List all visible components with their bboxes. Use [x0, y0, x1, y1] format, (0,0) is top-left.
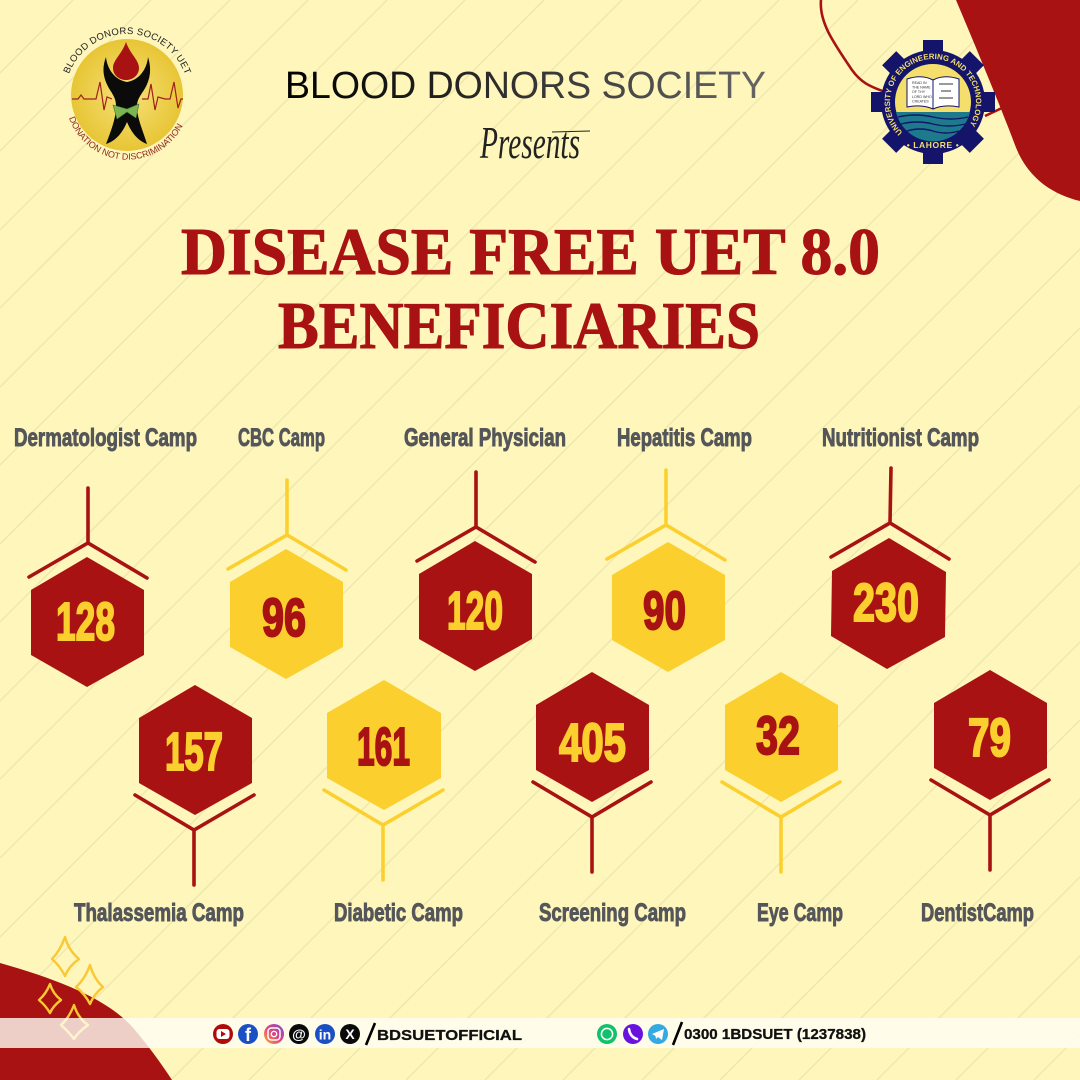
title: [181, 215, 880, 363]
logo text top: BLOOD DONORS SOCIETY UET: [63, 27, 192, 74]
icon: whatsapp: [597, 1024, 617, 1044]
icon: linkedin: in: [319, 1026, 331, 1042]
logo: Blood Donors Society: [63, 27, 192, 160]
title: DISEASE FREE UET 8.0: [181, 215, 880, 289]
camp: Diabetic 161: Diabetic Camp: [334, 899, 463, 927]
icon: facebook: f: [245, 1025, 252, 1045]
camp: General Physician 120: [404, 424, 566, 671]
camp: Hepatitis 90: 90: [643, 581, 686, 641]
icon: linkedin: [315, 1024, 335, 1044]
ring text bottom: • LAHORE •: [907, 140, 959, 150]
title: BENEFICIARIES: [278, 289, 760, 363]
icon: facebook: [238, 1024, 258, 1045]
icon: figure: [103, 57, 150, 144]
decorative red corner top right: [956, 0, 1080, 201]
camp: Nutritionist 230: [822, 424, 979, 669]
camp: CBC 96: [228, 424, 346, 679]
contact band: [0, 1018, 1080, 1048]
icon: gear: [871, 40, 995, 164]
camp: Thalassemia 157: 157: [165, 722, 223, 782]
icon: instagram: [264, 1024, 284, 1044]
script: Presents: [479, 117, 590, 168]
camp: Dentist 79: DentistCamp: [921, 899, 1034, 927]
icon: x: [340, 1024, 360, 1044]
phone number: 0300 1BDSUET (1237838): [684, 1027, 866, 1043]
camp: Dermatologist 128: 128: [56, 592, 115, 652]
camp: General Physician 120: General Physician: [404, 424, 566, 452]
slash divider left: [366, 1023, 375, 1045]
logo: University of Engineering and Technology: [871, 40, 995, 164]
icon: sparkle stars: [39, 937, 103, 1039]
camp: Eye 32: 32: [756, 706, 800, 766]
camp: Dentist 79: 79: [968, 708, 1011, 768]
logo: University of Engineering and Technology: READ IN: [912, 81, 927, 85]
logo: University of Engineering and Technology: CREATES: [912, 99, 929, 103]
camp: Thalassemia 157: Thalassemia Camp: [74, 899, 244, 927]
icon: youtube: [213, 1024, 233, 1044]
icon: water waves: [896, 112, 970, 141]
camp: Nutritionist 230: Nutritionist Camp: [822, 424, 979, 452]
camp: Hepatitis 90: Hepatitis Camp: [617, 424, 752, 452]
camp: Dermatologist 128: [14, 424, 197, 687]
camp: Screening 405: 405: [559, 713, 626, 773]
camp: CBC 96: 96: [262, 588, 306, 648]
logo: University of Engineering and Technology: OF THY: [912, 90, 926, 94]
icon: open book: [907, 77, 959, 109]
camp: Eye 32: Eye Camp: [757, 899, 843, 927]
social icons: [213, 1024, 360, 1045]
icon: green belt: [113, 104, 139, 119]
logo: University of Engineering and Technology: THE NAME: [912, 86, 931, 90]
camp: Dentist 79: [921, 670, 1049, 927]
decorative red corner bottom left: [0, 963, 172, 1080]
script: Presents: Presents: [479, 117, 580, 168]
camp: Screening 405: Screening Camp: [539, 899, 686, 927]
camp: Diabetic 161: 161: [357, 717, 410, 777]
icon: x: X: [345, 1026, 355, 1042]
icon: blood drop: [113, 42, 139, 80]
icon: telegram: [648, 1024, 668, 1044]
ring text: UNIVERSITY OF ENGINEERING AND TECHNOLOGY: [884, 54, 982, 136]
icon: viber: [623, 1024, 643, 1044]
handle: BDSUETOFFICIAL: [377, 1027, 522, 1044]
camp: General Physician 120: 120: [447, 581, 503, 641]
heading: Blood Donors Society: BLOOD DONORS SOCIETY: [285, 65, 766, 107]
icon: heartbeat line: [72, 82, 183, 110]
slash divider right: [673, 1022, 682, 1045]
camp: CBC 96: CBC Camp: [238, 424, 325, 452]
camp: Thalassemia 157: [74, 685, 254, 927]
thin red curve behind university logo: [821, 0, 1002, 116]
icon: threads: [289, 1024, 309, 1044]
icon: threads: @: [292, 1026, 306, 1042]
contact icons: [597, 1024, 668, 1044]
camp: Nutritionist 230: 230: [853, 573, 919, 633]
camp: Diabetic 161: [324, 680, 463, 927]
camp: Screening 405: [533, 672, 686, 927]
camp: Eye 32: [722, 672, 843, 927]
camp: Hepatitis 90: [607, 424, 752, 672]
logo text bottom: DONATION NOT DISCRIMINATION: [69, 116, 182, 160]
camp: Dermatologist 128: Dermatologist Camp: [14, 424, 197, 452]
logo: University of Engineering and Technology: LORD WHO: [912, 95, 932, 99]
